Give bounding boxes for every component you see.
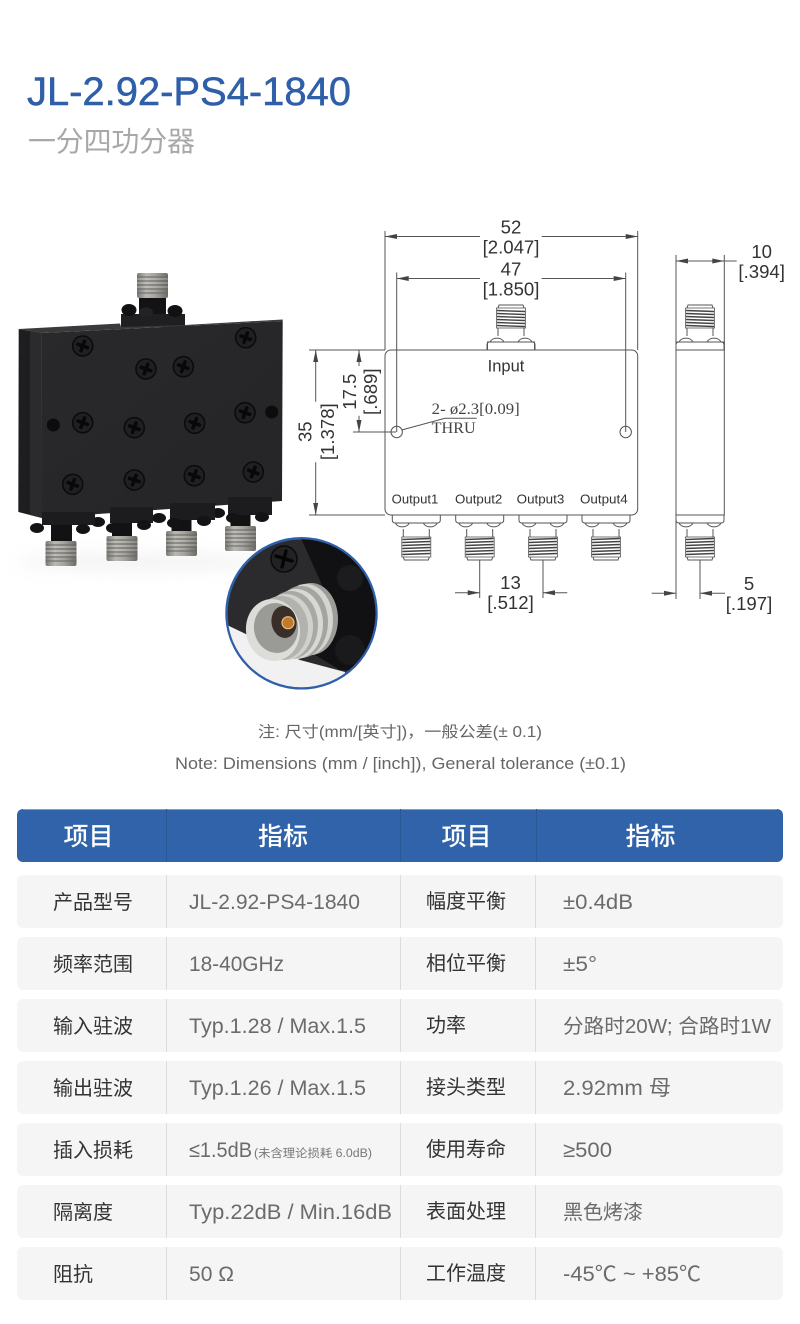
input connector drawing — [487, 305, 535, 350]
mounting holes and callout — [391, 401, 631, 438]
row: 插入损耗 / 使用寿命: 插入损耗 — [53, 1139, 133, 1162]
row: 插入损耗 / 使用寿命: ≥500 — [563, 1139, 612, 1162]
row: 插入损耗 / 使用寿命 — [17, 1123, 783, 1176]
row: 插入损耗 / 使用寿命: (未含理论损耗 6.0dB) — [254, 1146, 372, 1160]
row: 频率范围 / 相位平衡: 相位平衡 — [426, 952, 506, 975]
dimension drawing — [294, 216, 785, 614]
port labels: Output3 — [517, 492, 564, 506]
dimension 47: [1.850] — [483, 278, 539, 300]
dimension 17.5: 17.5 — [339, 374, 360, 410]
row: 频率范围 / 相位平衡 — [17, 937, 783, 990]
mounting holes and callout: THRU — [432, 420, 476, 437]
output connector drawings — [392, 515, 630, 560]
row: 阻抗 / 工作温度: -45℃ ~ +85℃ — [563, 1263, 701, 1286]
dimension 13 — [455, 560, 567, 613]
row: 输入驻波 / 功率: 分路时20W; 合路时1W — [563, 1015, 771, 1038]
row: 产品型号 / 幅度平衡: JL-2.92-PS4-1840 — [189, 891, 360, 914]
row: 阻抗 / 工作温度 — [17, 1247, 783, 1300]
row: 输出驻波 / 接头类型: Typ.1.26 / Max.1.5 — [189, 1077, 366, 1100]
dimension 17.5: [.689] — [360, 368, 381, 415]
table header: 项目 — [441, 823, 492, 851]
dimension 10: 10 — [751, 241, 772, 262]
inset: connector close-up — [225, 536, 380, 695]
side view — [676, 305, 724, 560]
subtitle: 一分四功分器 — [28, 126, 195, 157]
port labels: Input — [488, 358, 525, 376]
dimension 13: [.512] — [487, 592, 534, 613]
port labels: Output2 — [455, 492, 502, 506]
output connector 2 — [91, 507, 153, 561]
row: 隔离度 / 表面处理: Typ.22dB / Min.16dB — [189, 1201, 392, 1224]
row: 输入驻波 / 功率: 输入驻波 — [53, 1015, 133, 1038]
row: 插入损耗 / 使用寿命: 使用寿命 — [426, 1138, 506, 1161]
input connector — [121, 273, 185, 327]
body side face — [18, 329, 42, 518]
port labels: Output1 — [392, 492, 438, 506]
body front face — [42, 321, 283, 518]
output connector 1 — [30, 512, 95, 566]
row: 频率范围 / 相位平衡: ±5° — [563, 953, 597, 976]
port labels: Output4 — [580, 492, 628, 506]
title: JL-2.92-PS4-1840 — [27, 70, 351, 114]
row: 产品型号 / 幅度平衡 — [17, 875, 783, 928]
row: 输出驻波 / 接头类型: 2.92mm 母 — [563, 1077, 671, 1100]
table header: 项目 — [63, 823, 114, 851]
dimension 5 — [652, 515, 772, 614]
row: 阻抗 / 工作温度: 阻抗 — [53, 1263, 93, 1286]
dimension 47: 47 — [501, 258, 521, 280]
product photo: power divider — [15, 273, 283, 571]
note: English: Note: Dimensions (mm / [inch]), General tolerance (±0.1) — [175, 754, 626, 773]
dimension 5: [.197] — [726, 593, 772, 614]
dimension 13: 13 — [500, 572, 521, 593]
table header: 指标 — [258, 823, 308, 851]
mounting holes — [47, 406, 278, 432]
row: 插入损耗 / 使用寿命: ≤1.5dB — [189, 1139, 252, 1162]
output connector 3 — [152, 503, 215, 556]
row: 隔离度 / 表面处理: 表面处理 — [426, 1200, 506, 1223]
row: 阻抗 / 工作温度: 工作温度 — [426, 1262, 506, 1285]
row: 产品型号 / 幅度平衡: 幅度平衡 — [426, 890, 506, 913]
row: 产品型号 / 幅度平衡: 产品型号 — [53, 891, 133, 914]
dimension 5: 5 — [744, 573, 754, 594]
dimension 52: 52 — [501, 216, 521, 238]
row: 隔离度 / 表面处理: 黑色烤漆 — [563, 1201, 643, 1224]
screws — [63, 328, 263, 494]
table header — [17, 809, 783, 862]
row: 输出驻波 / 接头类型: 接头类型 — [426, 1076, 506, 1099]
row: 输出驻波 / 接头类型: 输出驻波 — [53, 1077, 133, 1100]
dimension 17.5 — [339, 350, 396, 432]
dimension 35: [1.378] — [317, 403, 338, 460]
row: 隔离度 / 表面处理 — [17, 1185, 783, 1238]
housing outline — [385, 350, 638, 515]
row: 阻抗 / 工作温度: 50 Ω — [189, 1263, 234, 1286]
output connector 4 — [211, 497, 272, 551]
dimension 10: [.394] — [738, 261, 785, 282]
dimension 47 — [397, 258, 626, 432]
dimension 52: [2.047] — [483, 236, 539, 258]
dimension 52 — [385, 216, 638, 350]
dimension 35 — [294, 350, 385, 515]
dimension 10 — [676, 241, 785, 350]
row: 输入驻波 / 功率: 功率 — [426, 1014, 466, 1037]
mounting holes and callout: 2- ø2.3[0.09] — [432, 401, 520, 418]
dimension 35: 35 — [294, 421, 316, 442]
table header: 指标 — [625, 823, 676, 851]
row: 频率范围 / 相位平衡: 频率范围 — [53, 953, 133, 976]
row: 频率范围 / 相位平衡: 18-40GHz — [189, 953, 284, 976]
port labels — [392, 358, 628, 506]
row: 产品型号 / 幅度平衡: ±0.4dB — [563, 891, 633, 914]
row: 输入驻波 / 功率: Typ.1.28 / Max.1.5 — [189, 1015, 366, 1038]
row: 隔离度 / 表面处理: 隔离度 — [53, 1201, 113, 1224]
row: 输出驻波 / 接头类型 — [17, 1061, 783, 1114]
note: Chinese: 注: 尺寸(mm/[英寸])，一般公差(± 0.1) — [258, 723, 542, 741]
product shadow — [15, 553, 265, 571]
row: 输入驻波 / 功率 — [17, 999, 783, 1052]
